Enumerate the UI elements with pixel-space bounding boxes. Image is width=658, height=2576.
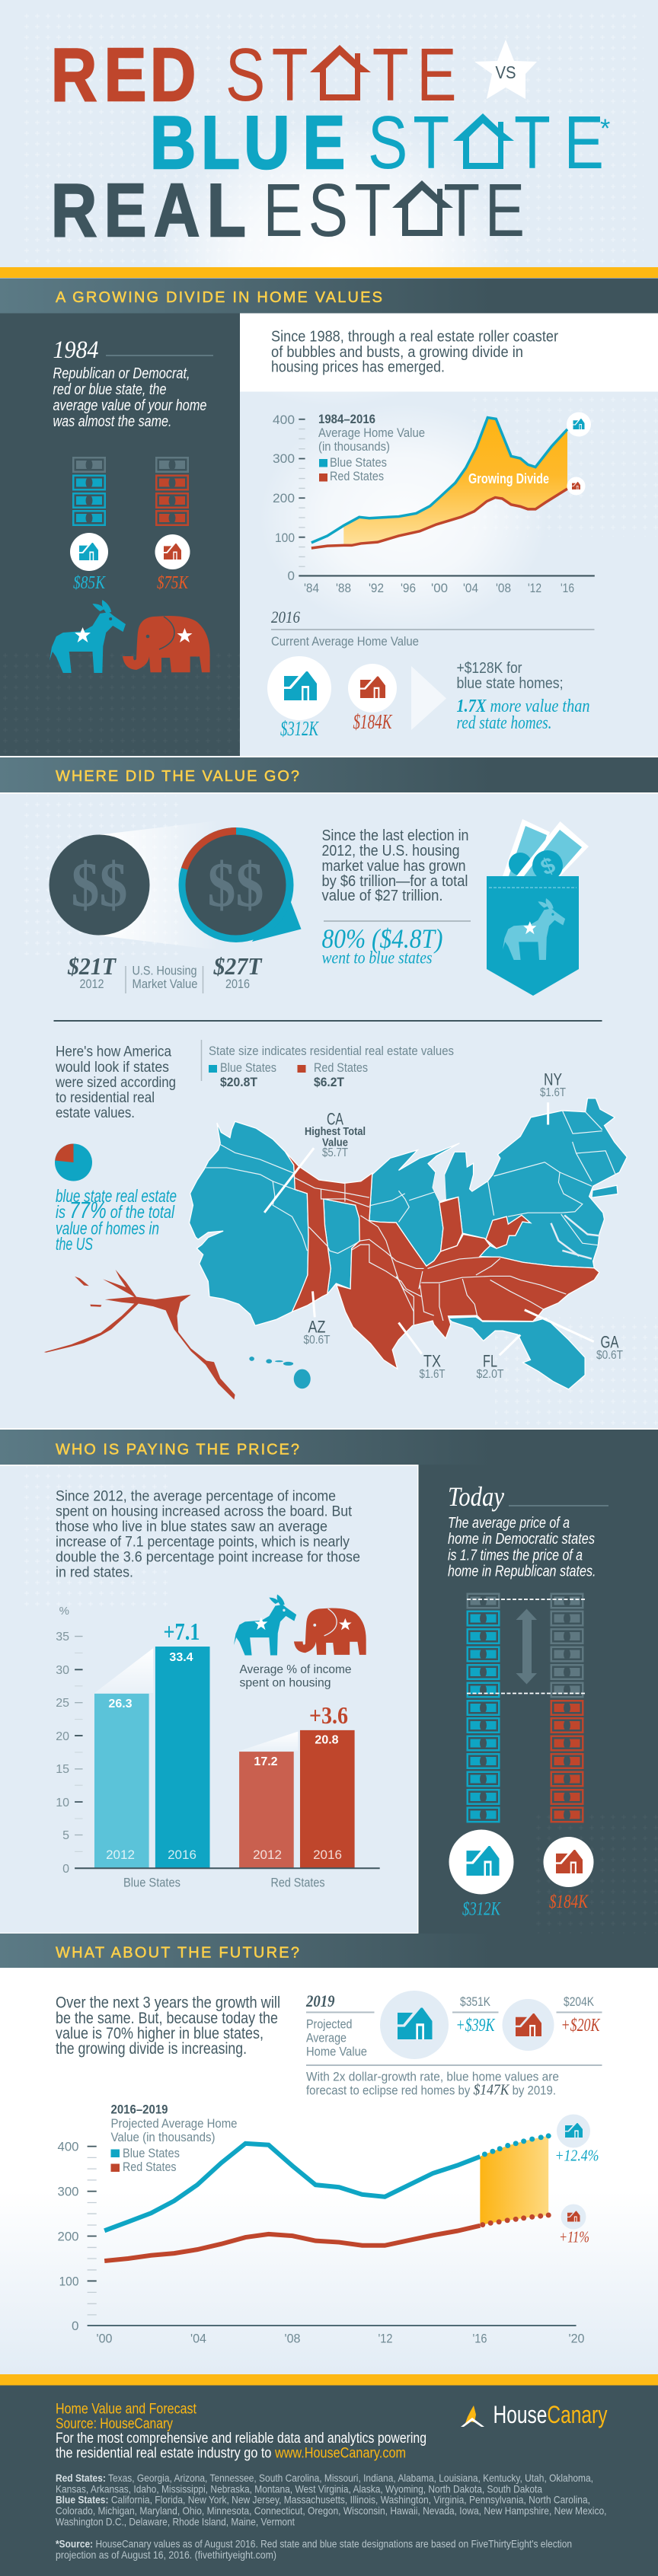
icon: house letter in estate <box>392 180 453 236</box>
callout: 80 percent: 80% ($4.8T) <box>321 923 443 954</box>
red states <box>286 1152 599 1369</box>
star badge: vs: VS <box>495 62 516 82</box>
section header: where did the value go <box>0 756 658 794</box>
callout: 77 percent: value of homes in <box>56 1218 159 1238</box>
axis labels: 15 <box>56 1763 69 1776</box>
text: cartogram intro: Here's how America <box>56 1044 171 1060</box>
legend: Average Home Value <box>318 426 425 440</box>
year labels: '00 <box>96 2331 113 2346</box>
year labels: '08 <box>496 581 511 595</box>
bar values <box>108 1651 339 1768</box>
year labels: '84 <box>304 581 319 595</box>
label: GA: GA <box>600 1332 619 1352</box>
text: comparison: +$128K for <box>457 660 522 677</box>
legend: 2016–2019 <box>111 2103 168 2116</box>
legend: map: $20.8T <box>220 1075 258 1089</box>
text: forecast note: forecast to eclipse red homes by $147K by 2019. <box>306 2081 556 2098</box>
chart: 1984-2016 home values <box>259 392 658 632</box>
icon: red home 2019 <box>503 1999 554 2051</box>
label: $27T: 2016 <box>225 977 250 991</box>
label: $21T <box>67 952 117 991</box>
bar years: 2012 <box>106 1848 135 1862</box>
legend: Blue States <box>330 455 387 470</box>
value: blue 2019: +$39K <box>455 2016 496 2036</box>
axis labels: 200 <box>58 2229 79 2244</box>
logo: HouseCanary: HouseCanary <box>494 2401 608 2428</box>
icon: red forecast marker <box>561 2205 586 2229</box>
text: chart caption: Average % of income <box>239 1663 352 1676</box>
chesapeake inlets <box>551 1215 599 1259</box>
value: $312K: $312K <box>280 717 319 740</box>
label: projected value: Average <box>306 2031 347 2045</box>
axis labels: % <box>59 1605 69 1618</box>
map: cartogram of the US <box>44 1070 658 1427</box>
text: source: Home Value and Forecast <box>56 2401 197 2418</box>
text: footnote: *Source: HouseCanary values as of August 2016. Red state and blue state designations are based on FiveThirtyEight's election <box>56 2538 572 2550</box>
legend: Projected Average Home <box>111 2116 238 2131</box>
bar years: 2012 <box>253 1848 282 1862</box>
label: NY <box>540 1070 566 1099</box>
legend: map: Red States <box>314 1060 368 1075</box>
Alaska <box>44 1270 235 1400</box>
label: CA: $5.7T <box>322 1146 348 1159</box>
year labels: '20 <box>568 2331 585 2346</box>
value: blue 2019 <box>455 1994 496 2036</box>
panel: intro text: Since 1988, through a real estate roller coaster <box>271 329 558 346</box>
chart: 2016-2019 projection <box>58 2103 599 2346</box>
text: market growth: value of $27 trillion. <box>321 888 443 904</box>
axis labels: 300 <box>273 451 295 466</box>
icon: blue money column <box>468 1594 499 1822</box>
text: comparison <box>457 660 589 733</box>
Hawaii <box>249 1357 311 1388</box>
difference markers <box>467 1599 586 1693</box>
text: income paragraph: double the 3.6 percentage point increase for those <box>56 1550 360 1565</box>
axis labels: 300 <box>58 2185 79 2198</box>
label: CA: Highest Total <box>305 1125 366 1138</box>
text: state lists: Washington D.C., Delaware, Rhode Island, Maine, Vermont <box>56 2515 295 2527</box>
text: comparison: blue state homes; <box>457 675 564 692</box>
year labels: '04 <box>190 2331 206 2346</box>
year labels: '12 <box>378 2331 393 2346</box>
callout: 80 percent <box>321 923 443 967</box>
text: market growth: 2012, the U.S. housing <box>321 843 460 859</box>
value: $184K today: $184K <box>549 1892 589 1912</box>
year labels: '12 <box>528 581 541 595</box>
text: future paragraph: the growing divide is increasing. <box>56 2040 247 2058</box>
text: today summary: The average price of a <box>448 1515 570 1532</box>
callout: 77 percent: blue state real estate <box>56 1186 177 1206</box>
section header: what about the future: WHAT ABOUT THE FUTURE? <box>56 1944 299 1961</box>
year labels: '08 <box>285 2331 300 2346</box>
change: +3.6: +3.6 <box>309 1701 348 1729</box>
star badge: vs <box>474 40 537 99</box>
heading: today: Today <box>448 1481 504 1512</box>
text: forecast note: With 2x dollar-growth rate, blue home values are <box>306 2069 559 2084</box>
label: NY: NY <box>544 1070 562 1089</box>
icon: red home 2016 <box>348 664 397 713</box>
label: $27T: $27T <box>213 952 263 980</box>
text: future paragraph: Over the next 3 years the growth will <box>56 1994 280 2011</box>
change: +7.1: +7.1 <box>163 1618 200 1645</box>
text: 1984 summary: average value of your home <box>53 397 207 414</box>
axis labels <box>58 2139 79 2333</box>
heading: 1984: 1984 <box>53 336 99 364</box>
bar years: 2016 <box>168 1848 196 1862</box>
section header: who is paying the price: WHO IS PAYING THE PRICE? <box>56 1442 299 1459</box>
label: market value <box>126 964 203 993</box>
icon: red money column <box>551 1594 583 1822</box>
text: today summary: home in Republican states. <box>448 1564 596 1580</box>
label: FL: FL <box>483 1352 497 1370</box>
label: TX: TX <box>423 1352 441 1370</box>
text: 1984 summary: red or blue state, the <box>53 381 166 398</box>
label: TX <box>419 1352 446 1381</box>
value: +11%: +11% <box>559 2227 589 2246</box>
axis labels: 100 <box>59 2275 79 2288</box>
bar values: 17.2 <box>254 1755 278 1768</box>
label: GA <box>596 1332 623 1362</box>
text: future paragraph: value is 70% higher in blue states, <box>56 2025 264 2042</box>
legend: map <box>201 1040 454 1089</box>
subheading: Current Average Home Value <box>271 634 419 649</box>
panel: intro text <box>240 314 658 391</box>
panel: 2019 forecast <box>305 1991 602 2098</box>
text: source <box>56 2401 426 2462</box>
text: market growth: Since the last election in <box>321 827 469 844</box>
label: AZ: AZ <box>308 1317 326 1337</box>
year labels: '92 <box>369 581 384 595</box>
axis labels: 200 <box>273 491 295 505</box>
bar values: 26.3 <box>108 1698 133 1710</box>
year labels <box>96 2331 585 2346</box>
legend: (in thousands) <box>318 439 390 454</box>
label: TX: $1.6T <box>419 1368 446 1381</box>
text: cartogram intro: would look if states <box>55 1060 169 1076</box>
text: cartogram intro <box>55 1044 176 1121</box>
value: red 2019: +$20K <box>561 2016 601 2036</box>
text: income paragraph: increase of 7.1 percentage points, which is nearly <box>56 1535 350 1550</box>
icon: 2016 coin with share ring <box>178 827 302 942</box>
text: income paragraph: spent on housing increased across the board. But <box>56 1504 353 1519</box>
axis labels: 30 <box>56 1664 69 1677</box>
label: AZ <box>303 1317 331 1347</box>
group labels: Red States <box>271 1876 324 1889</box>
callout: 77 percent: the US <box>56 1234 93 1254</box>
callout: 77 percent: is 77% of the total <box>56 1197 175 1223</box>
year labels: '16 <box>561 581 574 595</box>
text: market growth <box>321 827 469 904</box>
label: growing divide: Growing Divide <box>468 471 549 486</box>
arrow <box>411 666 446 730</box>
arrow: price gap <box>516 1609 537 1684</box>
title: blue state: STA TE <box>368 101 604 184</box>
text: today summary: is 1.7 times the price of a <box>448 1547 583 1564</box>
label: NY: $1.6T <box>540 1086 566 1099</box>
label: FL <box>477 1352 504 1381</box>
icon: red home 1984 <box>155 534 190 569</box>
text: cartogram intro: were sized according <box>55 1075 176 1091</box>
section header: growing divide <box>0 279 658 314</box>
panel: hero <box>23 11 644 407</box>
title: red state: RED <box>51 34 196 117</box>
panel: market value coins <box>19 795 302 993</box>
bar values: 33.4 <box>169 1651 193 1664</box>
text: income paragraph: Since 2012, the average percentage of income <box>56 1489 336 1504</box>
label: CA: CA <box>327 1110 343 1128</box>
text: cartogram intro: to residential real <box>56 1090 155 1106</box>
yellow band: footer <box>0 2374 658 2386</box>
blue west states <box>190 1098 627 1389</box>
panel: 2016 value <box>267 607 594 740</box>
section header: what about the future <box>0 1933 658 1968</box>
icon: blue chart marker <box>567 413 591 437</box>
title: real estate: ESTATE <box>264 169 525 252</box>
axis labels: 0 <box>288 569 295 583</box>
value: $75K: $75K <box>157 573 190 593</box>
icon: blue home today <box>449 1830 513 1894</box>
axis labels: 10 <box>56 1797 69 1809</box>
label: GA: $0.6T <box>596 1349 623 1362</box>
icon: 2012 coin <box>49 834 149 935</box>
text: chart caption: spent on housing <box>239 1676 331 1690</box>
icon: 2012 coin: $$ <box>72 850 128 920</box>
legend: Value (in thousands) <box>111 2130 215 2144</box>
legend: 1984–2016 <box>318 412 375 426</box>
legend <box>318 412 425 483</box>
axis labels <box>56 1605 69 1876</box>
legend: Blue States <box>123 2146 180 2160</box>
text: market growth: by $6 trillion—for a total <box>321 873 468 890</box>
panel: intro text: of bubbles and busts, a growing divide in <box>271 344 523 361</box>
value: blue 2019: $351K <box>460 1994 491 2009</box>
label: market value: Market Value <box>133 977 198 991</box>
chart: share pie <box>55 1143 92 1181</box>
title: red state: STA TE <box>225 33 456 116</box>
text: market growth: market value has grown <box>321 858 466 875</box>
icon: elephant <box>123 616 210 672</box>
axis labels: 0 <box>62 1863 69 1876</box>
icon: donkey <box>50 600 126 673</box>
group labels: Blue States <box>123 1876 180 1889</box>
icon: red home today <box>544 1837 594 1887</box>
text: source: the residential real estate industry go to www.HouseCanary.com <box>56 2445 406 2462</box>
axis labels: 400 <box>58 2139 79 2154</box>
title: blue state <box>150 101 610 185</box>
year labels: '04 <box>463 581 478 595</box>
text: footnote <box>56 2538 572 2561</box>
label: $21T: 2012 <box>79 977 104 991</box>
section header: growing divide: A GROWING DIVIDE IN HOME VALUES <box>56 289 382 306</box>
text: today summary <box>448 1515 596 1580</box>
label: projected value <box>306 2017 367 2058</box>
yellow band <box>0 267 658 278</box>
text: income paragraph: in red states. <box>56 1565 133 1580</box>
title: real estate <box>51 169 525 253</box>
value: red 2019 <box>561 1994 601 2036</box>
legend <box>111 2103 238 2174</box>
state borders <box>206 1111 615 1325</box>
text: cartogram intro: estate values. <box>56 1105 135 1121</box>
divider <box>53 1020 602 1022</box>
text: income paragraph: those who live in blue states saw an average <box>56 1519 327 1535</box>
section header: where did the value go: WHERE DID THE VALUE GO? <box>56 768 299 785</box>
callout: 77 percent <box>56 1186 177 1254</box>
text: state lists: Kansas, Arkansas, Idaho, Mississippi, Nebraska, Montana, West Virginia, Alaska, Wyoming, North Dakota, South Dakota <box>56 2483 542 2495</box>
axis labels: 20 <box>56 1730 69 1743</box>
text: state lists <box>56 2472 606 2527</box>
title: red state <box>51 33 456 117</box>
legend: map: Blue States <box>220 1060 276 1075</box>
label: AZ: $0.6T <box>303 1334 331 1347</box>
icon: red chart marker <box>567 477 585 495</box>
panel: 1984 <box>0 314 240 757</box>
value: +12.4%: +12.4% <box>554 2147 599 2165</box>
value: $85K: $85K <box>73 573 107 593</box>
legend: map: State size indicates residential real estate values <box>209 1044 454 1058</box>
bar years: 2016 <box>313 1848 342 1862</box>
panel: today <box>419 1465 658 1934</box>
label: CA <box>305 1110 366 1159</box>
icon: blue money stack <box>73 457 105 525</box>
legend: Red States <box>123 2160 177 2174</box>
label: $21T: $21T <box>67 952 117 980</box>
text: future paragraph: be the same. But, because today the <box>56 2010 278 2027</box>
year labels: '16 <box>472 2331 487 2346</box>
text: comparison: red state homes. <box>457 713 551 733</box>
panel: future <box>0 1968 658 2374</box>
axis labels: 25 <box>56 1697 69 1710</box>
logo: HouseCanary <box>461 2401 608 2428</box>
label: CA: Value <box>322 1136 348 1149</box>
text: 1984 summary <box>53 365 207 430</box>
axis labels: 5 <box>62 1829 69 1842</box>
text: today summary: home in Democratic states <box>448 1531 595 1548</box>
value: red 2019: $204K <box>564 1994 595 2009</box>
icon: blue home 2019 <box>380 1991 449 2059</box>
group labels <box>123 1876 324 1889</box>
icon: pocket with money <box>487 819 589 996</box>
leader lines <box>264 1102 594 1355</box>
text: chart caption <box>239 1663 352 1690</box>
text: state lists: Red States: Texas, Georgia, Arizona, Tennessee, South Carolina, Missouri, Indiana, Alabama, Louisiana, Kentucky, Utah, Oklahoma, <box>56 2472 593 2484</box>
text: 1984 summary: was almost the same. <box>53 413 172 430</box>
text: footnote: projection as of August 16, 2016. (fivethirtyeight.com) <box>56 2549 276 2561</box>
chart: income bars <box>56 1605 380 1889</box>
label: projected value: Home Value <box>306 2045 367 2058</box>
callout: 80 percent: went to blue states <box>321 948 433 967</box>
text: state lists: Blue States: California, Florida, New York, New Jersey, Massachusetts, Illinois, Washington, Virginia, Pennsylvania, North Carolina, <box>56 2494 590 2506</box>
panel: intro text: housing prices has emerged. <box>271 359 445 376</box>
label: $27T <box>213 952 263 991</box>
panel: income share <box>0 1465 419 1933</box>
axis labels: 400 <box>273 413 295 427</box>
text: income paragraph <box>56 1489 360 1580</box>
axis labels: 100 <box>275 531 295 545</box>
title: real estate: REAL <box>51 170 246 253</box>
text: forecast note <box>306 2069 559 2098</box>
axis labels: 0 <box>72 2319 79 2333</box>
legend: map: $6.2T <box>314 1075 345 1089</box>
year labels <box>304 581 574 595</box>
year labels: '88 <box>336 581 351 595</box>
icon: red money stack <box>156 457 188 525</box>
axis labels: 35 <box>56 1631 69 1643</box>
text: source: Source: HouseCanary <box>56 2416 173 2432</box>
bar values: 20.8 <box>315 1734 339 1746</box>
text: source: For the most comprehensive and reliable data and analytics powering <box>56 2431 426 2447</box>
value: $312K today: $312K <box>462 1899 501 1920</box>
label: FL: $2.0T <box>477 1368 504 1381</box>
icon: pocket with money: $ <box>537 853 559 881</box>
value: $184K: $184K <box>353 710 393 733</box>
heading: 2019: 2019 <box>305 1991 335 2010</box>
heading: 2016: 2016 <box>271 607 300 626</box>
year labels: '96 <box>401 581 416 595</box>
text: 1984 summary: Republican or Democrat, <box>53 365 190 382</box>
label: market value: U.S. Housing <box>133 964 196 977</box>
legend: Red States <box>330 469 384 483</box>
section header: who is paying the price <box>0 1428 658 1465</box>
title: blue state: * <box>600 114 610 143</box>
icon: blue home 2016 <box>267 656 331 720</box>
icon: donkey and elephant <box>234 1594 366 1655</box>
text: future paragraph <box>56 1994 280 2058</box>
icon: 2016 coin with share ring: $$ <box>207 850 264 920</box>
panel: footer <box>0 2386 658 2576</box>
icon: blue forecast marker <box>557 2115 590 2148</box>
title: blue state: BLUE <box>150 102 345 185</box>
icon: blue home 1984 <box>70 533 108 571</box>
axis labels <box>273 413 295 583</box>
text: comparison: 1.7X more value than <box>457 697 589 716</box>
bar years <box>106 1848 342 1862</box>
label: projected value: Projected <box>306 2017 352 2031</box>
year labels: '00 <box>431 581 448 595</box>
